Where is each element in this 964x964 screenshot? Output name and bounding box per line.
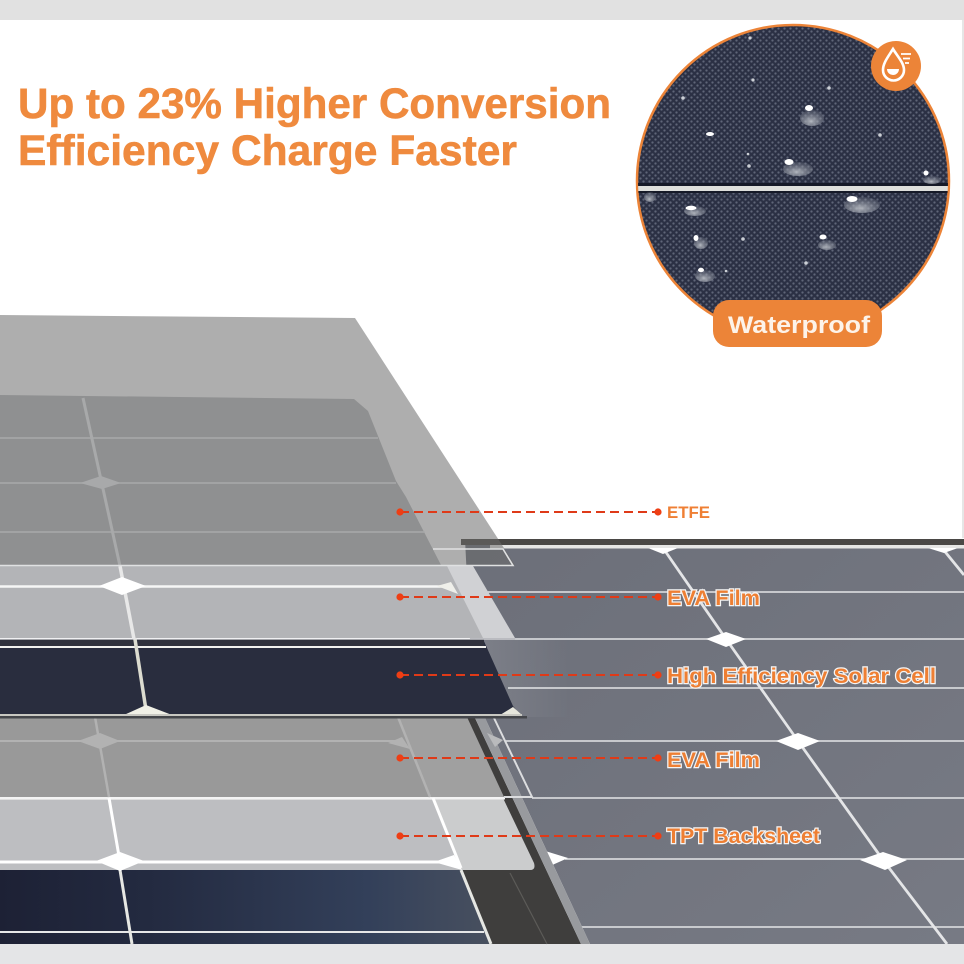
label: EVA film upper: EVA Film [667,587,760,610]
label: TPT backsheet: TPT Backsheet [667,825,820,848]
layer: ETFE sheet [0,315,515,566]
icon: water drop badge [871,41,921,91]
label: EVA film lower: EVA Film [667,749,760,772]
dashed leader: ETFE [396,508,662,516]
title [18,80,611,175]
dashed leader: EVA film upper [396,593,662,601]
waterproof label pill: Waterproof [728,312,871,339]
waterproof close-up circle [637,25,949,337]
layer: upper EVA film [0,566,515,639]
dashed leader: EVA film lower [396,754,662,762]
layer: high efficiency solar cell [0,620,527,718]
layer: lower EVA film [0,717,532,797]
label: ETFE: ETFE [667,503,710,522]
panel frame edge [440,718,590,944]
waterproof label pill [713,300,882,347]
layer: TPT backsheet [0,798,534,871]
dashed leader: solar cell [396,671,662,679]
title: Efficiency Charge Faster [18,127,517,175]
background solar panel [457,539,964,944]
dashed leader: TPT backsheet [396,832,662,840]
label: high efficiency solar cell: High Efficiency Solar Cell [667,665,936,688]
bottom solar cells [0,870,491,944]
title: Up to 23% Higher Conversion [18,80,611,128]
